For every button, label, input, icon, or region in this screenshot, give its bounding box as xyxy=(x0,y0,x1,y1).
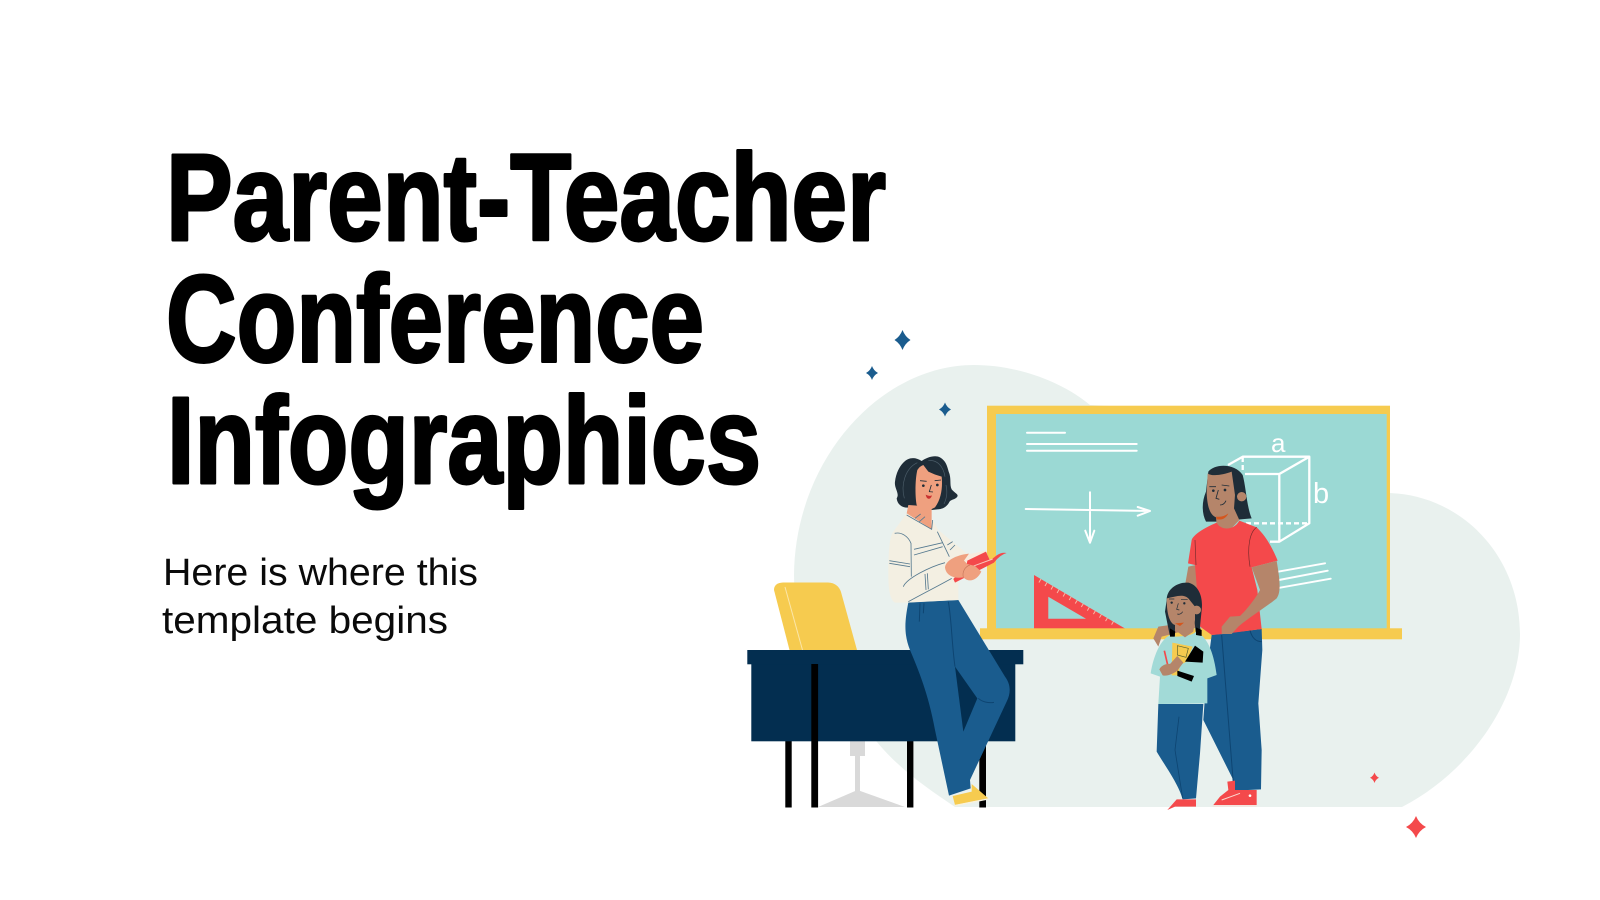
teacher xyxy=(888,456,1010,806)
desk xyxy=(747,650,1023,808)
child hands and pencil xyxy=(1159,651,1183,676)
chalk arrows xyxy=(1026,492,1150,543)
child hair xyxy=(1165,583,1202,637)
subtitle: template begins xyxy=(162,600,448,642)
parent shoes xyxy=(1213,781,1257,806)
chalk writing lines xyxy=(1027,433,1137,451)
parent trousers xyxy=(1203,629,1262,791)
teacher trousers xyxy=(905,600,1010,796)
parent arm behind child xyxy=(1153,565,1200,647)
chalk lines right xyxy=(1278,563,1331,588)
teacher shoe xyxy=(953,784,989,806)
subtitle xyxy=(162,552,478,642)
chalk tray xyxy=(980,628,1402,639)
parent and child xyxy=(1151,466,1280,810)
chalkboard xyxy=(980,406,1402,639)
title: Parent-Teacher xyxy=(166,130,886,267)
child shirt xyxy=(1151,632,1217,704)
chalk label b: b xyxy=(1313,478,1329,510)
teacher head xyxy=(915,465,942,510)
teacher book and hands xyxy=(945,551,1007,583)
chair xyxy=(774,582,905,807)
parent t-shirt xyxy=(1188,521,1278,635)
child xyxy=(1151,583,1217,810)
chalk cube xyxy=(1228,457,1309,542)
title xyxy=(166,130,886,510)
child trousers xyxy=(1157,704,1203,799)
title: Conference xyxy=(166,252,704,388)
teacher neck and hair xyxy=(895,456,958,529)
parent hair xyxy=(1203,466,1252,522)
parent face xyxy=(1207,472,1246,533)
child head xyxy=(1167,596,1202,637)
parent forearm and hand xyxy=(1222,561,1280,634)
sparkle stars xyxy=(866,330,1426,838)
child shoes xyxy=(1167,799,1196,810)
teacher shirt xyxy=(888,513,967,603)
red set square xyxy=(1034,575,1125,628)
title: Infographics xyxy=(167,373,761,510)
parent xyxy=(1153,466,1280,806)
background blob xyxy=(794,365,1520,807)
chalk label a: a xyxy=(1271,428,1286,458)
child book xyxy=(1172,643,1203,682)
subtitle: Here is where this xyxy=(163,552,478,594)
